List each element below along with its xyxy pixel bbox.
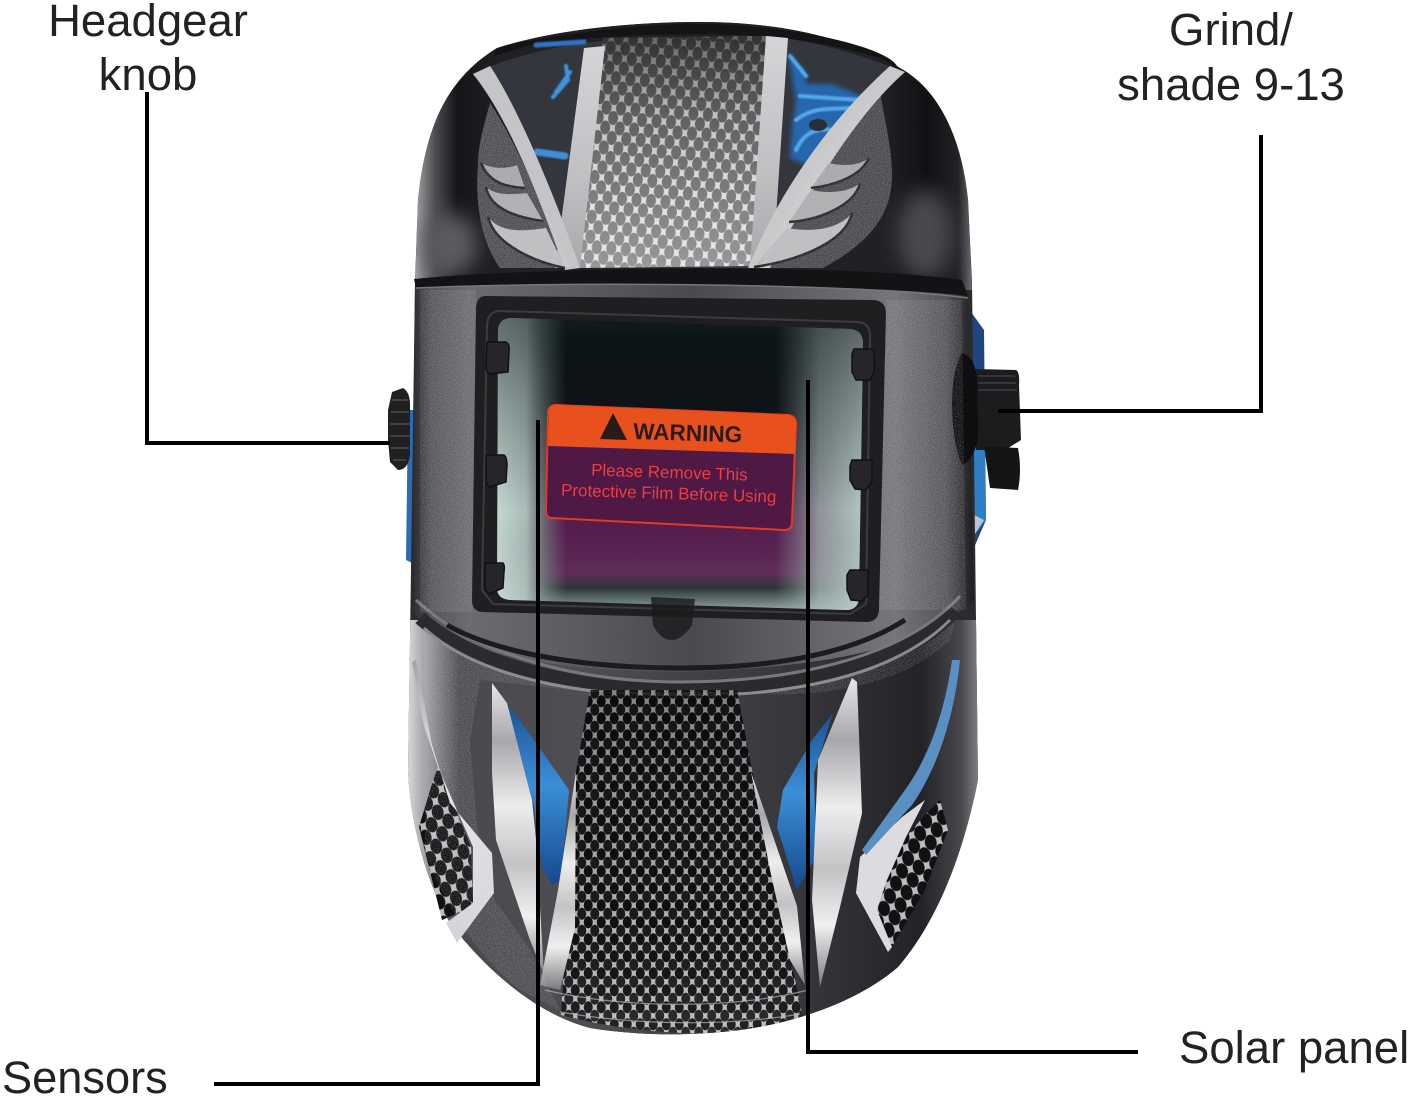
right side white sweep <box>856 800 925 952</box>
lower notch <box>651 597 695 640</box>
right side mesh vent <box>877 800 948 950</box>
window frame <box>472 296 886 622</box>
left side white sweep <box>412 660 494 943</box>
label: solar panel: Solar panel <box>1179 1022 1409 1073</box>
top decal background <box>473 36 900 268</box>
top rim <box>494 24 898 68</box>
right side blue streak <box>862 660 960 855</box>
right side blue shell <box>406 305 986 580</box>
lower honeycomb panel <box>561 690 805 1034</box>
leader line: headgear knob <box>147 92 390 443</box>
label: headgear knob <box>48 0 248 100</box>
helmet illustration <box>388 22 1021 1040</box>
silver stripes <box>473 36 905 270</box>
helmet shell <box>408 22 978 1040</box>
warning heading: WARNING <box>633 418 743 447</box>
warning label <box>546 405 796 530</box>
right wing ribs <box>754 158 869 267</box>
dome gloss patches <box>422 190 953 280</box>
leader line: sensors <box>214 420 538 1084</box>
label: grind and shade <box>1117 4 1345 110</box>
blue flames <box>536 42 866 165</box>
warning message: Protective Film Before Using <box>561 481 777 506</box>
headgear knob <box>388 388 410 470</box>
top honeycomb panel <box>578 36 768 268</box>
left side mesh vent <box>419 767 473 920</box>
leader line: solar panel <box>808 380 1138 1052</box>
leader line: grind and shade <box>998 135 1261 411</box>
right side knob ring and grind and shade knob <box>952 353 1021 490</box>
lower silver stripes <box>492 678 862 990</box>
side wing panels <box>477 92 892 268</box>
label: grind and shade: Grind/ <box>1169 4 1293 55</box>
warning message: Please Remove This <box>591 461 748 484</box>
chin curved band <box>416 596 960 696</box>
metallic speckle overlay <box>410 90 980 1030</box>
sensor clips <box>485 342 874 601</box>
label: headgear knob: knob <box>99 49 197 100</box>
label: grind and shade: shade 9-13 <box>1117 59 1345 110</box>
viewing glass <box>490 315 870 615</box>
visor housing <box>412 269 974 672</box>
left wing ribs <box>481 163 565 268</box>
chin bottom lines <box>545 990 808 1023</box>
lower blue flames <box>507 703 833 890</box>
warning triangle icon <box>600 413 627 440</box>
